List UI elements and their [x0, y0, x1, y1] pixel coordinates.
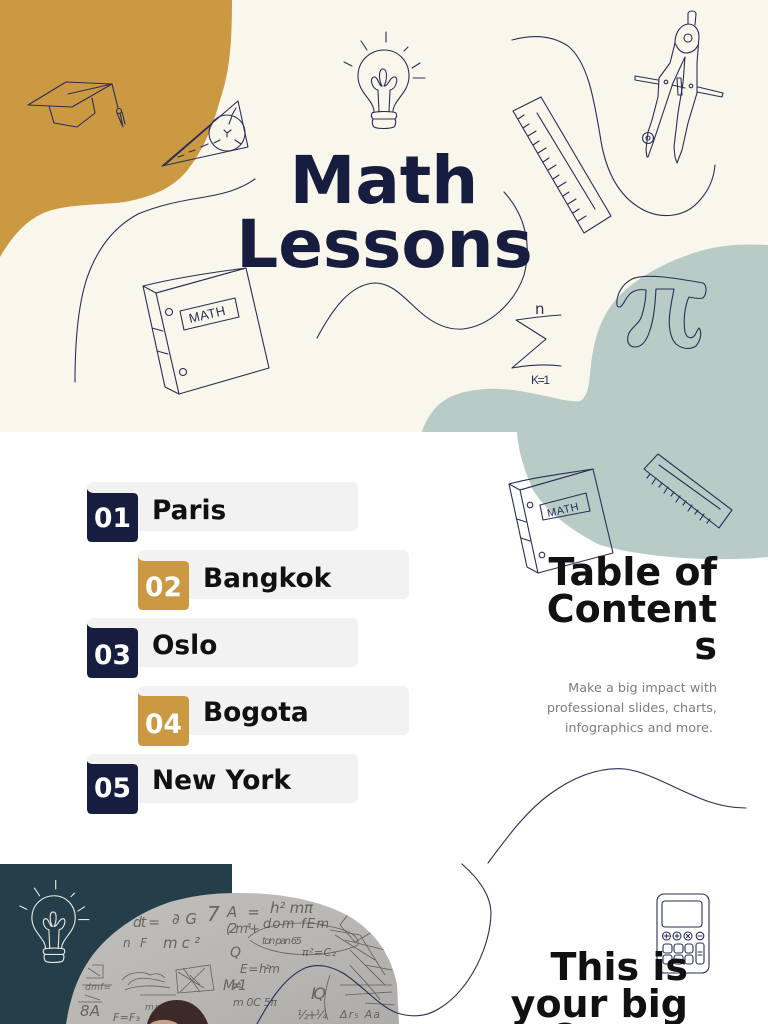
icon: summation symbol	[512, 300, 561, 387]
list item 02: Bangkok	[203, 563, 333, 594]
panel: cover slide background	[0, 0, 768, 432]
photo: woman at formula wall: dt =	[133, 915, 160, 931]
list item 02	[138, 550, 409, 610]
photo: woman at formula wall: M≠1	[223, 978, 247, 994]
photo: woman at formula wall: 7	[207, 902, 220, 926]
photo: woman at formula wall: h² mπ	[270, 899, 314, 917]
shape: teal blob cover	[422, 245, 768, 432]
label: n: n	[535, 300, 545, 318]
list item 04	[138, 686, 409, 746]
icon: pi symbol	[617, 276, 706, 348]
list item 04: 04	[145, 709, 182, 740]
curve: centre wave	[317, 192, 527, 338]
curve: top right	[512, 36, 715, 216]
photo: woman at formula wall: 8 A	[80, 1002, 100, 1020]
photo: woman at formula wall: Q	[230, 945, 241, 961]
curve: bottom loop	[257, 864, 491, 1024]
photo: woman at formula wall: mn 2	[145, 1003, 171, 1013]
curve: left sweep	[75, 179, 255, 382]
photo: woman at formula wall: nF	[123, 936, 148, 950]
woman hair	[147, 1000, 208, 1024]
label: binder title: MATH	[187, 303, 227, 326]
icon: binder cover	[143, 268, 269, 394]
photo: woman at formula wall: IQ	[311, 984, 326, 1003]
list item 05	[87, 754, 358, 814]
photo: woman at formula wall	[60, 885, 405, 1024]
list item 01	[87, 482, 358, 542]
list item 04: Bogota	[203, 697, 309, 728]
photo: woman at formula wall: π²=C₂	[302, 946, 337, 959]
heading: Math Lessons	[236, 142, 533, 283]
woman forehead	[150, 1020, 178, 1024]
icon: drawing compass	[635, 11, 723, 163]
heading: Table of Contents: s	[694, 624, 717, 668]
photo: woman at formula wall: m 0C 5π	[233, 996, 277, 1009]
icon: ruler small	[644, 454, 732, 528]
icon: light bulb	[344, 32, 425, 128]
list item 05: 05	[94, 773, 131, 804]
icon: ruler	[513, 97, 611, 233]
photo: woman at formula wall: mc²	[163, 934, 200, 952]
label: small binder title: MATH	[546, 501, 580, 520]
photo: woman at formula wall: dom fEm	[263, 917, 329, 932]
text block: description: infographics and more.	[565, 721, 713, 736]
photo: woman at formula wall: ton pan 65	[262, 936, 302, 947]
heading: Table of Contents	[547, 550, 717, 668]
label: k=1: K=1	[531, 373, 550, 387]
shape: teal blob contents	[517, 432, 768, 559]
photo: woman at formula wall: dmf=	[85, 983, 111, 993]
heading: This is your big	[511, 945, 688, 1024]
list item 01: Paris	[152, 495, 226, 526]
icon: calculator	[657, 894, 709, 973]
list item 05: New York	[152, 765, 292, 796]
text block: description: professional slides, charts,	[547, 701, 717, 716]
text block: description: Make a big impact with	[568, 681, 717, 696]
list item 02: 02	[145, 572, 182, 603]
shape: gold blob	[0, 0, 232, 257]
heading: Table of Contents: Content	[547, 587, 717, 631]
heading: Math Lessons: Math	[290, 142, 478, 219]
icon: light bulb white	[20, 880, 89, 962]
list item 03	[87, 618, 358, 678]
heading: This is your big: This is	[550, 945, 688, 989]
icon: graduation cap	[28, 82, 125, 127]
list item 03: Oslo	[152, 630, 217, 661]
curve: contents wave	[488, 769, 746, 863]
icon: binder small	[509, 469, 613, 573]
photo: woman at formula wall: F=F₃	[113, 1011, 141, 1024]
photo: woman at formula wall: Δr₅ Aa	[339, 1008, 380, 1021]
panel: dark teal block	[0, 864, 232, 1024]
photo: woman at formula wall: A =	[226, 903, 260, 921]
photo: woman at formula wall: (2m⁴+	[226, 922, 260, 937]
heading: Table of Contents: Table of	[548, 550, 717, 594]
text block: description	[547, 681, 717, 736]
icon: set square with protractor	[162, 101, 248, 166]
photo: woman at formula wall: ½ + ¼	[297, 1008, 327, 1022]
panel: contents slide background	[0, 432, 768, 864]
list item 03: 03	[94, 640, 131, 671]
heading: Math Lessons: Lessons	[236, 206, 533, 283]
photo: woman at formula wall: E = h²m	[240, 962, 280, 976]
list item 01: 01	[94, 503, 131, 534]
photo: woman at formula wall: ∂G	[172, 910, 197, 928]
